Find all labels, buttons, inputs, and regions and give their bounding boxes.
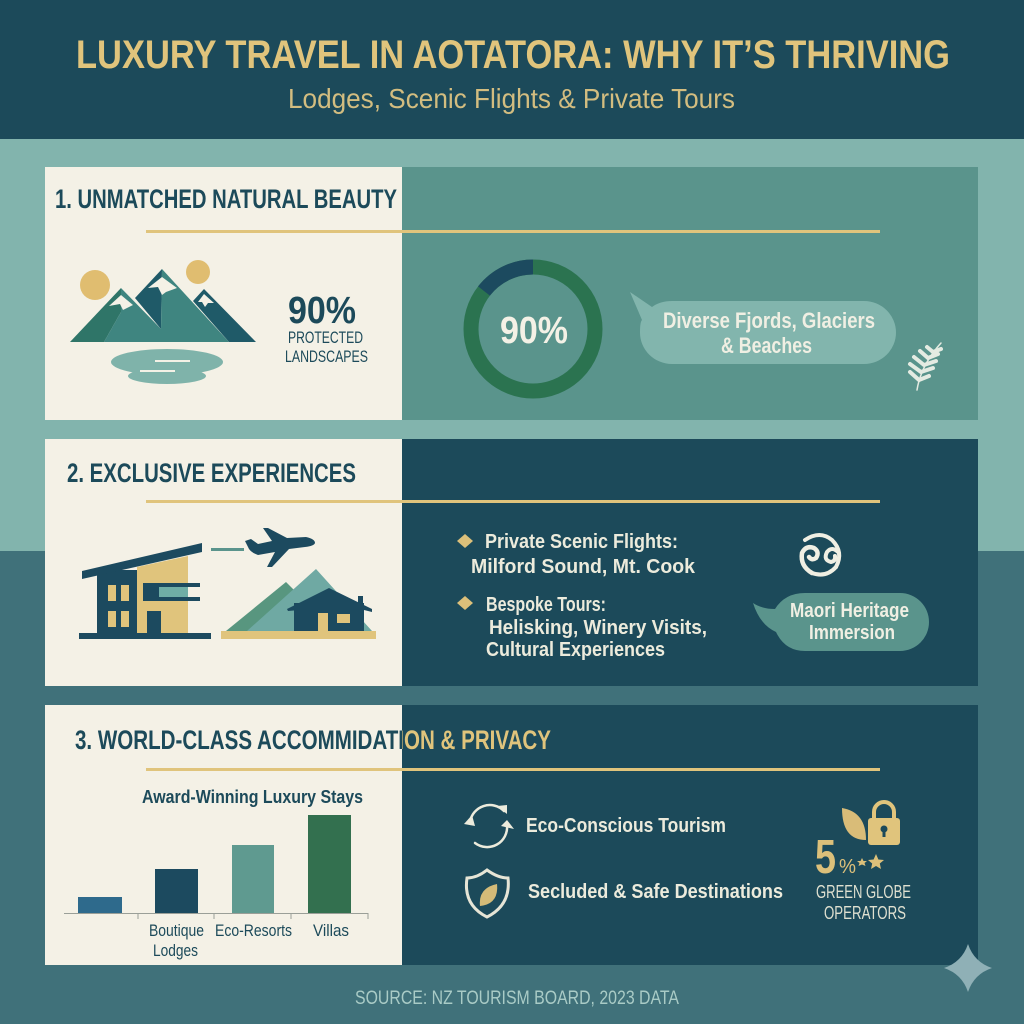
- bar chart: award-winning luxury stays: Villas: [313, 921, 349, 940]
- label: eco-conscious tourism: Eco-Conscious Tourism: [526, 815, 726, 837]
- icon: shield with leaf: [466, 870, 508, 917]
- icon: modern lodge: [79, 543, 211, 639]
- donut chart: 90%: 90%: [500, 310, 568, 352]
- panel 2 heading: 2. EXCLUSIVE EXPERIENCES: [67, 458, 356, 488]
- callout: maori heritage: Immersion: [809, 622, 895, 644]
- bullet: bespoke tours: Helisking, Winery Visits,: [489, 617, 707, 639]
- bar chart: award-winning luxury stays: Award-Winning Luxury Stays: [142, 787, 363, 807]
- panel 1 heading: 1. UNMATCHED NATURAL BEAUTY: [55, 184, 397, 214]
- bar chart: award-winning luxury stays: Eco-Resorts: [215, 921, 292, 940]
- stat: 90% protected landscapes: LANDSCAPES: [285, 347, 368, 366]
- stat: 90% protected landscapes: 90%: [288, 290, 356, 332]
- stat: 90% protected landscapes: PROTECTED: [288, 328, 363, 347]
- header banner: [0, 0, 1024, 139]
- stat: 5% green globe operators: %: [839, 856, 856, 878]
- donut chart: 90%: [471, 267, 595, 391]
- icon: koru spiral: [802, 535, 839, 575]
- bullet: bespoke tours: [457, 594, 707, 661]
- stat: 5% green globe operators: [815, 831, 911, 923]
- callout: diverse fjords: [630, 292, 896, 364]
- icon: leaf and padlock: [842, 802, 900, 845]
- stat: 90% protected landscapes: [285, 290, 368, 366]
- stat: 5% green globe operators: 5: [815, 831, 836, 884]
- icon: plane with flight trail: [211, 528, 315, 567]
- icon: mountains with suns and lake: [70, 260, 256, 384]
- icon: mountain cabin: [221, 569, 376, 639]
- source note: SOURCE: NZ TOURISM BOARD, 2023 DATA: [355, 988, 679, 1009]
- callout: maori heritage: Maori Heritage: [790, 600, 909, 622]
- icon: recycle arrows: [464, 805, 514, 847]
- panel 3 heading: 3. WORLD-CLASS ACCOMMIDATION & PRIVACY: [75, 725, 551, 755]
- icon: silver fern: [910, 343, 941, 390]
- bar chart: award-winning luxury stays: [64, 787, 368, 960]
- bar chart: award-winning luxury stays: Lodges: [153, 941, 198, 960]
- callout: diverse fjords: & Beaches: [721, 333, 812, 358]
- bar chart: award-winning luxury stays: Boutique: [149, 921, 204, 940]
- panel 1: unmatched natural beauty: [45, 167, 978, 420]
- bullet: bespoke tours: Cultural Experiences: [486, 639, 665, 661]
- panel 3: world-class accommodation: [45, 705, 978, 965]
- stat: 5% green globe operators: GREEN GLOBE: [816, 882, 911, 902]
- decorative sparkle: [944, 944, 992, 992]
- bullet: private scenic flights: [457, 531, 696, 578]
- subtitle: Lodges, Scenic Flights & Private Tours: [288, 83, 735, 114]
- callout: diverse fjords: Diverse Fjords, Glaciers: [663, 308, 875, 333]
- bullet: private scenic flights: Private Scenic Flights:: [485, 531, 678, 553]
- callout: maori heritage: [753, 593, 929, 651]
- panel 2: exclusive experiences: [45, 439, 978, 686]
- bullet: bespoke tours: Bespoke Tours:: [486, 594, 606, 616]
- stat: 5% green globe operators: OPERATORS: [824, 903, 906, 923]
- label: secluded and safe destinations: Secluded & Safe Destinations: [528, 881, 783, 903]
- bullet: private scenic flights: Milford Sound, Mt. Cook: [471, 556, 696, 578]
